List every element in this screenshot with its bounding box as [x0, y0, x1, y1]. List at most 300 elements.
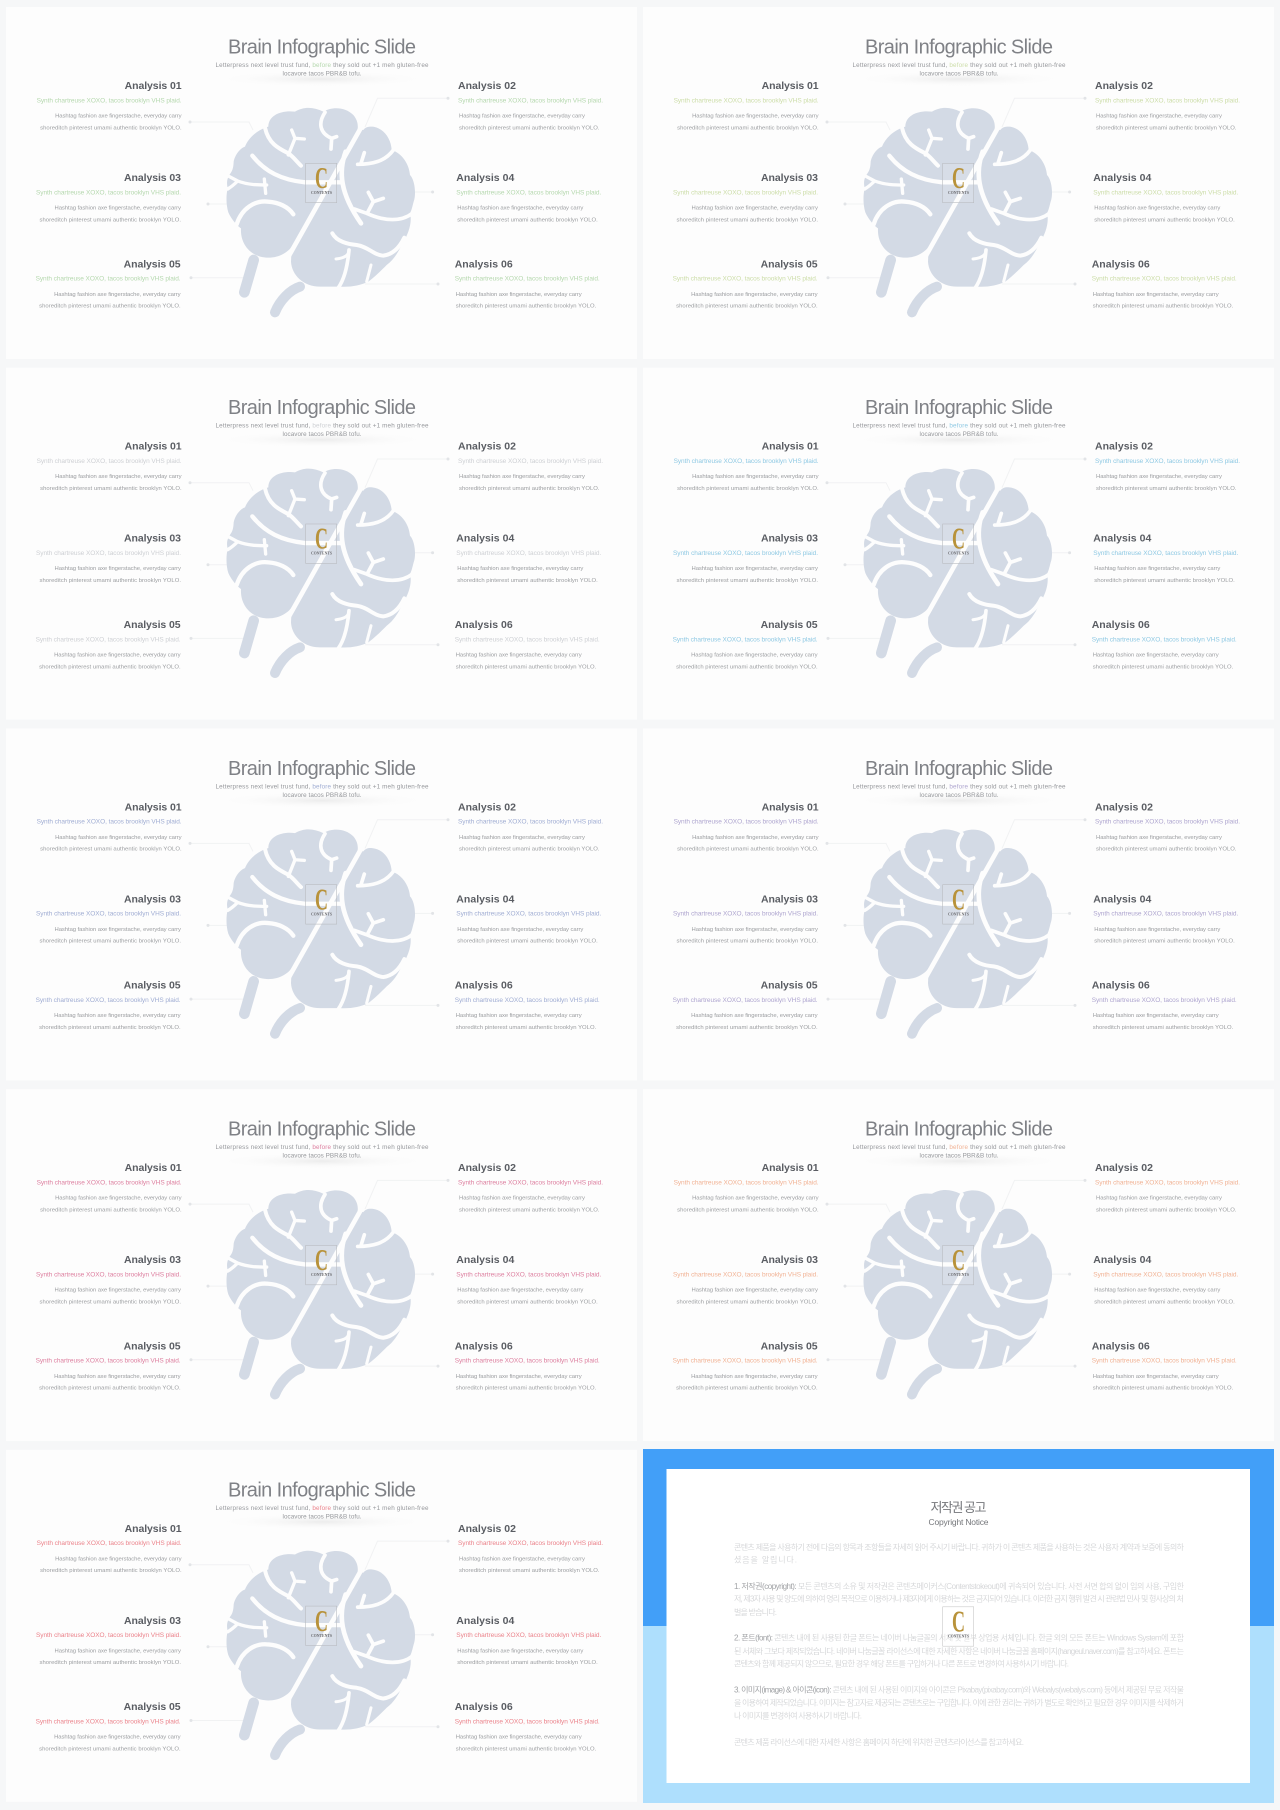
item: Analysis 03	[36, 1615, 181, 1666]
item: Analysis 04: shoreditch pinterest umami authentic brooklyn YOLO.	[457, 1660, 598, 1666]
item: Analysis 05: Synth chartreuse XOXO, tacos brooklyn VHS plaid.	[673, 636, 818, 643]
title: Brain Infographic Slide	[228, 36, 416, 58]
item: Analysis 03: Hashtag fashion axe fingerstache, everyday carry	[692, 1288, 818, 1294]
item: Analysis 04: Synth chartreuse XOXO, tacos brooklyn VHS plaid.	[456, 1271, 601, 1278]
copyright clause 3: 나 이미지를 변경하여 사용하시기 바랍니다.	[734, 1710, 862, 1720]
item: Analysis 06	[455, 980, 600, 1031]
item: Analysis 01	[37, 1523, 182, 1574]
item: Analysis 05: Analysis 05	[124, 619, 181, 631]
logo: C	[315, 1242, 328, 1277]
subtitle	[216, 62, 429, 78]
item: Analysis 05: Analysis 05	[124, 1701, 181, 1713]
item: Analysis 05	[673, 619, 818, 670]
item: Analysis 04: Synth chartreuse XOXO, tacos brooklyn VHS plaid.	[1093, 189, 1238, 196]
item: Analysis 03: Analysis 03	[761, 893, 818, 905]
item: Analysis 03: Analysis 03	[124, 1615, 181, 1627]
item: Analysis 02: Hashtag fashion axe fingerstache, everyday carry	[459, 1196, 585, 1202]
logo: C	[315, 1603, 328, 1638]
subtitle	[852, 1144, 1066, 1160]
logo	[306, 1603, 337, 1646]
copyright clause 3: 3. 이미지(image) & 아이콘(icon): 콘텐츠 내에 된 사용된 이미지와 아이콘은 Pixabay(pixabay.com)와 Webalys(webalys.com) 등에서 제공된 무료 저작물	[734, 1684, 1184, 1694]
item: Analysis 05	[673, 258, 818, 310]
item: Analysis 03	[673, 893, 818, 945]
title: Brain Infographic Slide	[865, 1119, 1053, 1141]
item: Analysis 03: Analysis 03	[761, 1254, 818, 1266]
item: Analysis 06: shoreditch pinterest umami authentic brooklyn YOLO.	[456, 664, 597, 670]
connectors	[826, 1179, 1086, 1368]
subtitle	[852, 783, 1066, 799]
item: Analysis 02: Hashtag fashion axe fingerstache, everyday carry	[1096, 835, 1222, 841]
item: Analysis 06: Hashtag fashion axe fingerstache, everyday carry	[1093, 292, 1219, 298]
item: Analysis 06: shoreditch pinterest umami authentic brooklyn YOLO.	[1093, 304, 1234, 310]
copyright intro: 콘텐츠 제품을 사용하기 전에 다음의 항목과 조항들을 자세히 읽어 주시기 바랍니다. 귀하가 이 콘텐츠 제품을 사용하는 것은 사용자 계약과 보증에 동의하	[734, 1542, 1185, 1552]
item: Analysis 04	[456, 1254, 601, 1305]
item: Analysis 06: Hashtag fashion axe fingerstache, everyday carry	[1093, 652, 1219, 658]
item: Analysis 01: shoreditch pinterest umami authentic brooklyn YOLO.	[677, 1207, 819, 1213]
logo	[943, 1242, 974, 1285]
item: Analysis 06	[1092, 619, 1237, 670]
logo: C	[952, 1242, 965, 1277]
item: Analysis 01: Hashtag fashion axe fingerstache, everyday carry	[55, 1196, 182, 1202]
item: Analysis 02: Synth chartreuse XOXO, tacos brooklyn VHS plaid.	[458, 1179, 603, 1186]
item: Analysis 06	[455, 619, 600, 670]
item: Analysis 04: Analysis 04	[456, 1615, 514, 1627]
item: Analysis 05: Hashtag fashion axe fingerstache, everyday carry	[691, 1013, 818, 1019]
item: Analysis 04: Analysis 04	[1093, 172, 1151, 184]
item: Analysis 06: Analysis 06	[1092, 258, 1150, 270]
item: Analysis 03: Synth chartreuse XOXO, tacos brooklyn VHS plaid.	[36, 550, 181, 557]
panel: orange variant	[643, 1089, 1274, 1441]
logo: C	[952, 160, 965, 195]
title: Brain Infographic Slide	[228, 1479, 416, 1501]
brain	[863, 469, 1052, 673]
item: Analysis 01	[37, 801, 182, 853]
copyright heading: Copyright Notice	[928, 1517, 989, 1527]
item: Analysis 04: shoreditch pinterest umami authentic brooklyn YOLO.	[457, 1299, 598, 1305]
item: Analysis 03	[673, 533, 818, 584]
item: Analysis 05: Synth chartreuse XOXO, tacos brooklyn VHS plaid.	[673, 276, 818, 283]
item: Analysis 01: shoreditch pinterest umami authentic brooklyn YOLO.	[677, 125, 819, 131]
item: Analysis 04: Synth chartreuse XOXO, tacos brooklyn VHS plaid.	[456, 550, 601, 557]
item: Analysis 04: Analysis 04	[456, 1254, 514, 1266]
connectors	[188, 97, 450, 286]
item: Analysis 03: Analysis 03	[761, 533, 818, 545]
item: Analysis 02	[1095, 801, 1240, 853]
item: Analysis 01: shoreditch pinterest umami authentic brooklyn YOLO.	[677, 847, 819, 853]
item: Analysis 03	[673, 1254, 818, 1305]
item: Analysis 05	[36, 1340, 181, 1392]
item: Analysis 03	[36, 893, 181, 945]
item: Analysis 04: Synth chartreuse XOXO, tacos brooklyn VHS plaid.	[456, 1632, 601, 1639]
subtitle: locavore tacos PBR&B tofu.	[282, 1513, 362, 1520]
item: Analysis 04	[456, 172, 601, 223]
item: Analysis 05: shoreditch pinterest umami authentic brooklyn YOLO.	[39, 304, 181, 310]
item: Analysis 04: Hashtag fashion axe fingerstache, everyday carry	[1094, 206, 1220, 212]
logo: CONTENTS	[948, 190, 969, 195]
item: Analysis 05	[673, 980, 818, 1031]
item: Analysis 05	[36, 619, 181, 670]
item: Analysis 02: Analysis 02	[458, 441, 516, 453]
item: Analysis 01: Analysis 01	[762, 80, 819, 92]
subtitle	[216, 1144, 429, 1160]
subtitle	[216, 1505, 429, 1520]
item: Analysis 01: Synth chartreuse XOXO, tacos brooklyn VHS plaid.	[674, 819, 819, 826]
item: Analysis 04: Hashtag fashion axe fingerstache, everyday carry	[457, 927, 583, 933]
item: Analysis 02: Analysis 02	[1095, 1162, 1153, 1174]
item: Analysis 03: shoreditch pinterest umami authentic brooklyn YOLO.	[40, 217, 181, 223]
item: Analysis 06: Hashtag fashion axe fingerstache, everyday carry	[456, 1013, 582, 1019]
item: Analysis 03: shoreditch pinterest umami authentic brooklyn YOLO.	[40, 578, 181, 584]
item: Analysis 04: Analysis 04	[456, 533, 514, 545]
logo	[943, 160, 974, 203]
copyright clause 2	[734, 1632, 1185, 1668]
subtitle: locavore tacos PBR&B tofu.	[920, 792, 999, 799]
item: Analysis 01: Analysis 01	[762, 441, 819, 453]
item: Analysis 04: Synth chartreuse XOXO, tacos brooklyn VHS plaid.	[456, 189, 601, 196]
item: Analysis 04	[1093, 533, 1238, 584]
logo: CONTENTS	[948, 911, 969, 916]
item: Analysis 05: shoreditch pinterest umami authentic brooklyn YOLO.	[39, 664, 181, 670]
item: Analysis 03: Analysis 03	[124, 533, 181, 545]
item: Analysis 01: Synth chartreuse XOXO, tacos brooklyn VHS plaid.	[37, 819, 182, 826]
copyright clause 3: 을 이용하여 제작되었습니다. 이미지는 참고자료 제공되는 콘텐츠로는 구입합니다. 이에 관한 권리는 귀하가 별도로 확인하고 필요한 경우 이미지를 삭제하거	[734, 1698, 1184, 1708]
item: Analysis 02: Hashtag fashion axe fingerstache, everyday carry	[459, 114, 585, 120]
copyright footer line: 콘텐츠 제품 라이선스에 대한 자세한 사항은 홈페이지 하단에 위치한 콘텐츠라이선스를 참고하세요.	[734, 1737, 1024, 1747]
item: Analysis 02: shoreditch pinterest umami authentic brooklyn YOLO.	[1096, 125, 1237, 131]
item: Analysis 02: Synth chartreuse XOXO, tacos brooklyn VHS plaid.	[458, 1540, 603, 1547]
logo: C	[315, 881, 328, 916]
item: Analysis 06	[1092, 980, 1237, 1031]
subtitle: Letterpress next level trust fund, before they sold out +1 meh gluten-free	[852, 423, 1066, 430]
item: Analysis 06: shoreditch pinterest umami authentic brooklyn YOLO.	[456, 1025, 597, 1031]
item: Analysis 01	[37, 80, 182, 131]
item: Analysis 06: Synth chartreuse XOXO, tacos brooklyn VHS plaid.	[455, 997, 600, 1004]
item: Analysis 04: Analysis 04	[456, 893, 514, 905]
item: Analysis 02: Hashtag fashion axe fingerstache, everyday carry	[459, 835, 585, 841]
copyright clause 1: 벌을 받습니다.	[734, 1607, 777, 1617]
item: Analysis 01: Analysis 01	[125, 801, 182, 813]
item: Analysis 02: Analysis 02	[458, 801, 516, 813]
logo	[943, 881, 974, 924]
item: Analysis 06	[1092, 1340, 1237, 1392]
item: Analysis 06: Synth chartreuse XOXO, tacos brooklyn VHS plaid.	[455, 1718, 600, 1725]
item: Analysis 02: shoreditch pinterest umami authentic brooklyn YOLO.	[459, 847, 600, 853]
subtitle: locavore tacos PBR&B tofu.	[920, 1153, 999, 1160]
connectors	[188, 458, 450, 646]
logo: CONTENTS	[311, 911, 332, 916]
item: Analysis 02: shoreditch pinterest umami authentic brooklyn YOLO.	[459, 125, 600, 131]
item: Analysis 06: Synth chartreuse XOXO, tacos brooklyn VHS plaid.	[455, 276, 600, 283]
item: Analysis 04: Analysis 04	[1093, 1254, 1151, 1266]
logo	[943, 521, 974, 563]
title: Brain Infographic Slide	[228, 758, 416, 780]
brain	[226, 829, 415, 1034]
item: Analysis 06: Synth chartreuse XOXO, tacos brooklyn VHS plaid.	[1092, 276, 1237, 283]
item: Analysis 04	[456, 893, 601, 945]
item: Analysis 01: Synth chartreuse XOXO, tacos brooklyn VHS plaid.	[37, 97, 182, 104]
item: Analysis 06: Analysis 06	[455, 1701, 513, 1713]
item: Analysis 06: Analysis 06	[455, 980, 513, 992]
item: Analysis 03: Synth chartreuse XOXO, tacos brooklyn VHS plaid.	[673, 550, 818, 557]
copyright clause 2: 2. 폰트(font): 콘텐츠 내에 된 사용된 한글 폰트는 네이버 나눔글꼴의 서체 및 일부 상업용 서체입니다. 한글 외의 모든 폰트는 Windows System에 포함	[734, 1632, 1185, 1642]
logo: CONTENTS	[311, 190, 332, 195]
item: Analysis 02	[1095, 80, 1240, 131]
panel: blue variant	[643, 368, 1274, 720]
item: Analysis 02: Synth chartreuse XOXO, tacos brooklyn VHS plaid.	[1095, 97, 1240, 104]
panel: yellow-green variant	[643, 7, 1274, 359]
item: Analysis 05: Analysis 05	[124, 258, 181, 270]
item: Analysis 02: shoreditch pinterest umami authentic brooklyn YOLO.	[459, 1207, 600, 1213]
item: Analysis 02: Analysis 02	[458, 80, 516, 92]
item: Analysis 05: shoreditch pinterest umami authentic brooklyn YOLO.	[676, 1025, 818, 1031]
subtitle: locavore tacos PBR&B tofu.	[282, 70, 362, 78]
panel: indigo variant	[6, 728, 637, 1080]
item: Analysis 05: shoreditch pinterest umami authentic brooklyn YOLO.	[676, 1386, 818, 1392]
item: Analysis 05: shoreditch pinterest umami authentic brooklyn YOLO.	[39, 1746, 181, 1752]
item: Analysis 06: Analysis 06	[1092, 980, 1150, 992]
item: Analysis 04: Hashtag fashion axe fingerstache, everyday carry	[457, 1288, 583, 1294]
logo: CONTENTS	[948, 551, 969, 556]
item: Analysis 05: shoreditch pinterest umami authentic brooklyn YOLO.	[676, 664, 818, 670]
item: Analysis 03: Synth chartreuse XOXO, tacos brooklyn VHS plaid.	[673, 189, 818, 196]
item: Analysis 03: Analysis 03	[124, 893, 181, 905]
item: Analysis 01	[674, 1162, 819, 1213]
item: Analysis 02: shoreditch pinterest umami authentic brooklyn YOLO.	[1096, 486, 1237, 492]
item: Analysis 01: Hashtag fashion axe fingerstache, everyday carry	[692, 474, 819, 480]
item: Analysis 04	[1093, 172, 1238, 223]
item: Analysis 03: shoreditch pinterest umami authentic brooklyn YOLO.	[676, 217, 818, 223]
item: Analysis 06: Analysis 06	[1092, 1340, 1150, 1352]
item: Analysis 03: Synth chartreuse XOXO, tacos brooklyn VHS plaid.	[36, 1271, 181, 1278]
item: Analysis 02: Hashtag fashion axe fingerstache, everyday carry	[1096, 1196, 1222, 1202]
subtitle: Letterpress next level trust fund, before they sold out +1 meh gluten-free	[852, 1144, 1066, 1151]
item: Analysis 05: shoreditch pinterest umami authentic brooklyn YOLO.	[676, 304, 818, 310]
item: Analysis 02: Synth chartreuse XOXO, tacos brooklyn VHS plaid.	[458, 458, 603, 465]
item: Analysis 04: Hashtag fashion axe fingerstache, everyday carry	[457, 566, 583, 572]
item: Analysis 01: Analysis 01	[125, 1162, 182, 1174]
subtitle: locavore tacos PBR&B tofu.	[282, 431, 362, 438]
item: Analysis 03: Hashtag fashion axe fingerstache, everyday carry	[54, 206, 181, 212]
item: Analysis 05: Hashtag fashion axe fingerstache, everyday carry	[54, 1735, 181, 1741]
item: Analysis 06	[455, 1340, 600, 1392]
item: Analysis 06: Hashtag fashion axe fingerstache, everyday carry	[456, 292, 582, 298]
item: Analysis 05: shoreditch pinterest umami authentic brooklyn YOLO.	[39, 1386, 181, 1392]
item: Analysis 03: Analysis 03	[761, 172, 818, 184]
copyright intro	[734, 1542, 1185, 1564]
panel: red variant	[6, 1450, 637, 1802]
item: Analysis 01: Synth chartreuse XOXO, tacos brooklyn VHS plaid.	[37, 1540, 182, 1547]
item: Analysis 01: Analysis 01	[762, 801, 819, 813]
item: Analysis 05: Hashtag fashion axe fingerstache, everyday carry	[691, 1374, 818, 1380]
item: Analysis 03: Hashtag fashion axe fingerstache, everyday carry	[54, 1648, 181, 1654]
item: Analysis 06: Analysis 06	[455, 619, 513, 631]
copyright heading	[928, 1500, 989, 1527]
item: Analysis 02: Analysis 02	[1095, 441, 1153, 453]
item: Analysis 02: shoreditch pinterest umami authentic brooklyn YOLO.	[1096, 847, 1237, 853]
item: Analysis 05: Hashtag fashion axe fingerstache, everyday carry	[54, 292, 181, 298]
item: Analysis 01: shoreditch pinterest umami authentic brooklyn YOLO.	[40, 1207, 182, 1213]
item: Analysis 06: Hashtag fashion axe fingerstache, everyday carry	[1093, 1374, 1219, 1380]
item: Analysis 06: Synth chartreuse XOXO, tacos brooklyn VHS plaid.	[1092, 636, 1237, 643]
item: Analysis 03: Synth chartreuse XOXO, tacos brooklyn VHS plaid.	[36, 911, 181, 918]
brain	[226, 108, 415, 312]
item: Analysis 06: shoreditch pinterest umami authentic brooklyn YOLO.	[1093, 664, 1234, 670]
subtitle: Letterpress next level trust fund, before they sold out +1 meh gluten-free	[216, 783, 429, 790]
item: Analysis 04: Hashtag fashion axe fingerstache, everyday carry	[1094, 1288, 1220, 1294]
item: Analysis 01: Hashtag fashion axe fingerstache, everyday carry	[55, 474, 182, 480]
title: Brain Infographic Slide	[228, 1119, 416, 1141]
item: Analysis 05: Synth chartreuse XOXO, tacos brooklyn VHS plaid.	[36, 1718, 181, 1725]
item: Analysis 02: Synth chartreuse XOXO, tacos brooklyn VHS plaid.	[1095, 1179, 1240, 1186]
item: Analysis 01: Analysis 01	[125, 80, 182, 92]
item: Analysis 06: shoreditch pinterest umami authentic brooklyn YOLO.	[456, 1746, 597, 1752]
item: Analysis 04: shoreditch pinterest umami authentic brooklyn YOLO.	[1094, 939, 1235, 945]
item: Analysis 01: shoreditch pinterest umami authentic brooklyn YOLO.	[40, 847, 182, 853]
item: Analysis 03: shoreditch pinterest umami authentic brooklyn YOLO.	[40, 1299, 181, 1305]
item: Analysis 01: Synth chartreuse XOXO, tacos brooklyn VHS plaid.	[674, 1179, 819, 1186]
item: Analysis 04: Synth chartreuse XOXO, tacos brooklyn VHS plaid.	[1093, 550, 1238, 557]
panel: pink variant	[6, 1089, 637, 1441]
logo: C	[952, 1604, 965, 1638]
item: Analysis 01: Analysis 01	[125, 1523, 182, 1535]
item: Analysis 02: Synth chartreuse XOXO, tacos brooklyn VHS plaid.	[458, 97, 603, 104]
item: Analysis 06: shoreditch pinterest umami authentic brooklyn YOLO.	[456, 304, 597, 310]
item: Analysis 04: shoreditch pinterest umami authentic brooklyn YOLO.	[1094, 217, 1235, 223]
subtitle: Letterpress next level trust fund, before they sold out +1 meh gluten-free	[216, 423, 429, 430]
item: Analysis 04: Synth chartreuse XOXO, tacos brooklyn VHS plaid.	[1093, 1271, 1238, 1278]
item: Analysis 04: shoreditch pinterest umami authentic brooklyn YOLO.	[457, 939, 598, 945]
item: Analysis 02	[1095, 1162, 1240, 1213]
item: Analysis 02: Hashtag fashion axe fingerstache, everyday carry	[1096, 474, 1222, 480]
item: Analysis 04: Hashtag fashion axe fingerstache, everyday carry	[1094, 566, 1220, 572]
subtitle	[852, 423, 1066, 438]
item: Analysis 02	[458, 1523, 603, 1574]
item: Analysis 04: Analysis 04	[1093, 893, 1151, 905]
item: Analysis 02: Analysis 02	[458, 1523, 516, 1535]
title: Brain Infographic Slide	[865, 397, 1053, 419]
subtitle	[852, 62, 1066, 78]
item: Analysis 03: Synth chartreuse XOXO, tacos brooklyn VHS plaid.	[673, 1271, 818, 1278]
item: Analysis 01: Analysis 01	[762, 1162, 819, 1174]
item: Analysis 04: Analysis 04	[1093, 533, 1151, 545]
connectors	[188, 1179, 450, 1368]
item: Analysis 06	[455, 1701, 600, 1752]
subtitle: locavore tacos PBR&B tofu.	[282, 792, 362, 799]
item: Analysis 04: shoreditch pinterest umami authentic brooklyn YOLO.	[457, 578, 598, 584]
item: Analysis 06: Hashtag fashion axe fingerstache, everyday carry	[456, 652, 582, 658]
panel: green variant	[6, 7, 637, 359]
logo: CONTENTS	[311, 1633, 332, 1638]
logo: C	[315, 160, 328, 195]
item: Analysis 01: Hashtag fashion axe fingerstache, everyday carry	[692, 114, 819, 120]
item: Analysis 01: Hashtag fashion axe fingerstache, everyday carry	[55, 114, 182, 120]
item: Analysis 06	[455, 258, 600, 310]
item: Analysis 05: Synth chartreuse XOXO, tacos brooklyn VHS plaid.	[673, 997, 818, 1004]
item: Analysis 03	[36, 533, 181, 584]
item: Analysis 01	[37, 441, 182, 492]
item: Analysis 05: shoreditch pinterest umami authentic brooklyn YOLO.	[39, 1025, 181, 1031]
item: Analysis 04	[456, 1615, 601, 1666]
item: Analysis 05: Hashtag fashion axe fingerstache, everyday carry	[691, 652, 818, 658]
item: Analysis 04: Synth chartreuse XOXO, tacos brooklyn VHS plaid.	[1093, 911, 1238, 918]
logo	[943, 1604, 974, 1646]
item: Analysis 01	[37, 1162, 182, 1213]
item: Analysis 02: shoreditch pinterest umami authentic brooklyn YOLO.	[1096, 1207, 1237, 1213]
item: Analysis 04: shoreditch pinterest umami authentic brooklyn YOLO.	[1094, 578, 1235, 584]
item: Analysis 06: shoreditch pinterest umami authentic brooklyn YOLO.	[1093, 1386, 1234, 1392]
item: Analysis 02	[458, 80, 603, 131]
connectors	[188, 1540, 450, 1728]
item: Analysis 06	[1092, 258, 1237, 310]
subtitle: Letterpress next level trust fund, before they sold out +1 meh gluten-free	[852, 62, 1066, 69]
item: Analysis 05: Analysis 05	[761, 980, 818, 992]
subtitle: Letterpress next level trust fund, before they sold out +1 meh gluten-free	[216, 1505, 429, 1512]
item: Analysis 05: Hashtag fashion axe fingerstache, everyday carry	[54, 1374, 181, 1380]
item: Analysis 04: shoreditch pinterest umami authentic brooklyn YOLO.	[457, 217, 598, 223]
subtitle: locavore tacos PBR&B tofu.	[920, 70, 999, 78]
connectors	[826, 97, 1086, 286]
item: Analysis 02: Hashtag fashion axe fingerstache, everyday carry	[1096, 114, 1222, 120]
item: Analysis 03: shoreditch pinterest umami authentic brooklyn YOLO.	[676, 578, 818, 584]
item: Analysis 06: Analysis 06	[455, 1340, 513, 1352]
item: Analysis 01: Synth chartreuse XOXO, tacos brooklyn VHS plaid.	[674, 458, 819, 465]
copyright clause 3	[734, 1684, 1184, 1720]
logo: C	[315, 521, 328, 556]
item: Analysis 05: Hashtag fashion axe fingerstache, everyday carry	[54, 652, 181, 658]
panel: copyright notice	[643, 1449, 1274, 1803]
item: Analysis 02: Analysis 02	[1095, 80, 1153, 92]
item: Analysis 03: Hashtag fashion axe fingerstache, everyday carry	[54, 1288, 181, 1294]
connectors	[826, 458, 1086, 646]
item: Analysis 05: Synth chartreuse XOXO, tacos brooklyn VHS plaid.	[36, 1358, 181, 1365]
item: Analysis 04: Hashtag fashion axe fingerstache, everyday carry	[457, 206, 583, 212]
item: Analysis 01: Hashtag fashion axe fingerstache, everyday carry	[55, 1556, 182, 1562]
item: Analysis 01	[674, 801, 819, 853]
item: Analysis 05	[673, 1340, 818, 1392]
item: Analysis 01: shoreditch pinterest umami authentic brooklyn YOLO.	[40, 125, 182, 131]
item: Analysis 03: Synth chartreuse XOXO, tacos brooklyn VHS plaid.	[673, 911, 818, 918]
item: Analysis 01: Synth chartreuse XOXO, tacos brooklyn VHS plaid.	[674, 97, 819, 104]
item: Analysis 01: Hashtag fashion axe fingerstache, everyday carry	[55, 835, 182, 841]
item: Analysis 03: shoreditch pinterest umami authentic brooklyn YOLO.	[676, 939, 818, 945]
logo: CONTENTS	[311, 1272, 332, 1277]
logo: C	[952, 881, 965, 916]
item: Analysis 02	[1095, 441, 1240, 492]
item: Analysis 03: Hashtag fashion axe fingerstache, everyday carry	[54, 927, 181, 933]
item: Analysis 02: Synth chartreuse XOXO, tacos brooklyn VHS plaid.	[458, 819, 603, 826]
item: Analysis 03: Analysis 03	[124, 1254, 181, 1266]
item: Analysis 05: Synth chartreuse XOXO, tacos brooklyn VHS plaid.	[673, 1358, 818, 1365]
item: Analysis 04	[1093, 1254, 1238, 1305]
panel: gray variant	[6, 368, 637, 720]
brain	[226, 1190, 415, 1394]
brain	[226, 469, 415, 673]
item: Analysis 06: Hashtag fashion axe fingerstache, everyday carry	[456, 1735, 582, 1741]
item: Analysis 01: Synth chartreuse XOXO, tacos brooklyn VHS plaid.	[37, 458, 182, 465]
logo: C	[952, 521, 965, 556]
copyright clause 2: 된 서체와 그보다 제작되었습니다. 네이버 나눔글꼴 라이선스에 대한 자세한 사항은 네이버 나눔글꼴 홈페이지(hangeul.naver.com)를 참고하세요. 폰트는	[734, 1646, 1184, 1656]
logo: CONTENTS	[311, 551, 332, 556]
copyright clause 1: 저, 제3자 사용 및 양도에 의하여 영리 목적으로 이용하거나 제3자에게 이용하는 것은 금지되어 있습니다. 이러한 금지 행위 발견 시 관련법 민사 및 형사상의 처	[734, 1594, 1184, 1604]
brain	[863, 829, 1052, 1034]
logo	[306, 521, 337, 563]
item: Analysis 03: Hashtag fashion axe fingerstache, everyday carry	[692, 566, 818, 572]
copyright clause 1	[734, 1581, 1185, 1617]
item: Analysis 01: shoreditch pinterest umami authentic brooklyn YOLO.	[40, 1568, 182, 1574]
item: Analysis 01: shoreditch pinterest umami authentic brooklyn YOLO.	[40, 486, 182, 492]
item: Analysis 02	[458, 1162, 603, 1213]
title: Brain Infographic Slide	[228, 397, 416, 419]
